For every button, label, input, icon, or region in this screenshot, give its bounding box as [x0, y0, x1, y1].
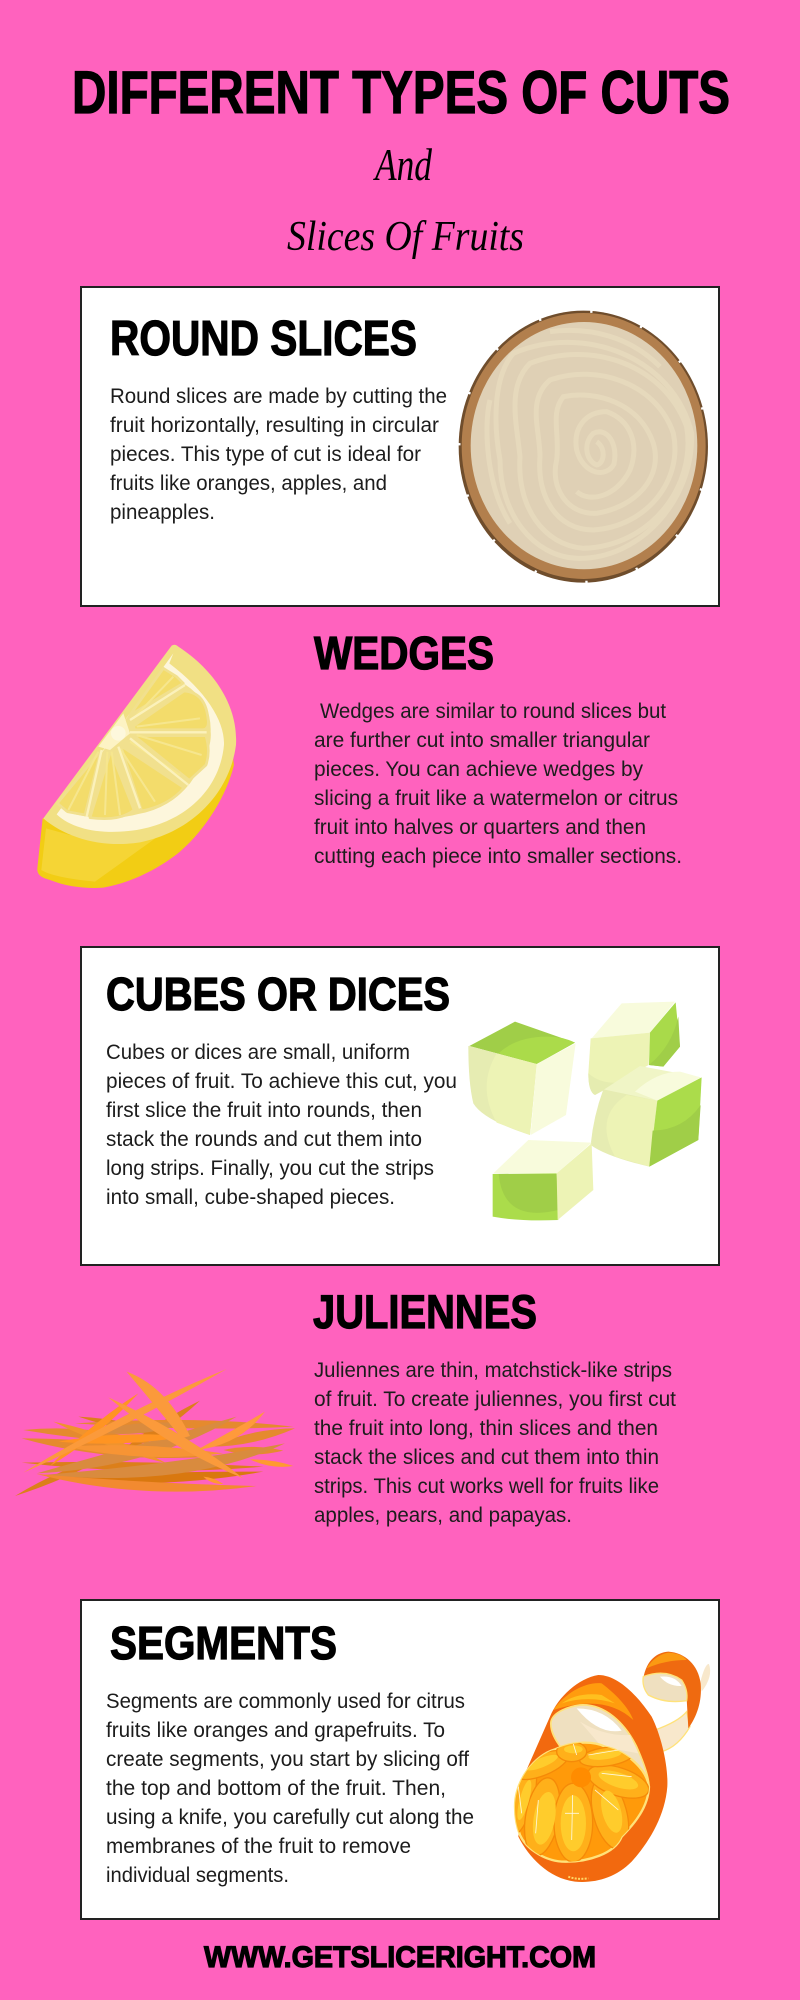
subtitle: And: And — [373, 140, 432, 190]
text: round slices description — [110, 385, 447, 524]
icon: peeled orange — [505, 1652, 710, 1882]
panel: segments — [81, 1600, 719, 1919]
text: juliennes description: apples, pears, and papayas. — [314, 1504, 572, 1527]
heading: segments: SEGMENTS — [110, 1617, 337, 1669]
text: wedges description: slicing a fruit like a watermelon or citrus — [314, 787, 678, 810]
text: segments description: individual segments. — [106, 1864, 289, 1887]
text: segments description: fruits like oranges and grapefruits. To — [106, 1719, 445, 1742]
text: segments description: the top and bottom of the fruit. Then, — [106, 1777, 446, 1800]
text: juliennes description: the fruit into long, thin slices and then — [314, 1417, 658, 1440]
text: wedges description: pieces. You can achieve wedges by — [314, 758, 643, 781]
text: wedges description: Wedges are similar to round slices but — [320, 700, 666, 723]
text: juliennes description: of fruit. To create juliennes, you first cut — [314, 1388, 676, 1411]
text: cubes description: into small, cube-shaped pieces. — [106, 1186, 395, 1209]
subtitle: Slices Of Fruits: Slices Of Fruits — [287, 214, 524, 260]
text: wedges description: are further cut into smaller triangular — [314, 729, 650, 752]
text: round slices description: pieces. This type of cut is ideal for — [110, 443, 421, 466]
icon: wood round slice — [459, 311, 708, 583]
text: cubes description: long strips. Finally, you cut the strips — [106, 1157, 434, 1180]
text: segments description: membranes of the fruit to remove — [106, 1835, 411, 1858]
text: wedges description: cutting each piece into smaller sections. — [314, 845, 682, 868]
panel: round slices — [81, 287, 719, 606]
icon: green fruit cubes — [468, 1002, 702, 1220]
heading: round slices: ROUND SLICES — [110, 312, 417, 366]
heading: wedges: WEDGES — [314, 627, 494, 679]
text: round slices description: fruits like oranges, apples, and — [110, 472, 387, 495]
text: juliennes description — [314, 1359, 676, 1527]
panel: cubes or dices — [81, 947, 719, 1265]
icon: julienne strips — [15, 1369, 295, 1496]
text: wedges description — [314, 700, 682, 868]
text: segments description: create segments, you start by slicing off — [106, 1748, 469, 1771]
heading: cubes or dices: CUBES OR DICES — [106, 968, 450, 1020]
text: cubes description: pieces of fruit. To achieve this cut, you — [106, 1070, 457, 1093]
text: segments description: using a knife, you carefully cut along the — [106, 1806, 474, 1829]
text: juliennes description: strips. This cut works well for fruits like — [314, 1475, 659, 1498]
heading: juliennes: JULIENNES — [313, 1285, 537, 1338]
text: round slices description: Round slices are made by cutting the — [110, 385, 447, 408]
text: juliennes description: stack the slices and cut them into thin — [314, 1446, 659, 1469]
icon: lemon wedge — [37, 645, 236, 888]
text: segments description — [106, 1690, 474, 1887]
text: cubes description: stack the rounds and cut them into — [106, 1128, 422, 1151]
text: round slices description: pineapples. — [110, 501, 215, 524]
text: cubes description: Cubes or dices are small, uniform — [106, 1041, 410, 1064]
text: round slices description: fruit horizontally, resulting in circular — [110, 414, 439, 437]
text: segments description: Segments are commonly used for citrus — [106, 1690, 465, 1713]
text: juliennes description: Juliennes are thin, matchstick-like strips — [314, 1359, 672, 1382]
footer url: WWW.GETSLICERIGHT.COM — [204, 1941, 596, 1974]
text: wedges description: fruit into halves or quarters and then — [314, 816, 646, 839]
text: cubes description: first slice the fruit into rounds, then — [106, 1099, 422, 1122]
text: cubes description — [106, 1041, 457, 1209]
